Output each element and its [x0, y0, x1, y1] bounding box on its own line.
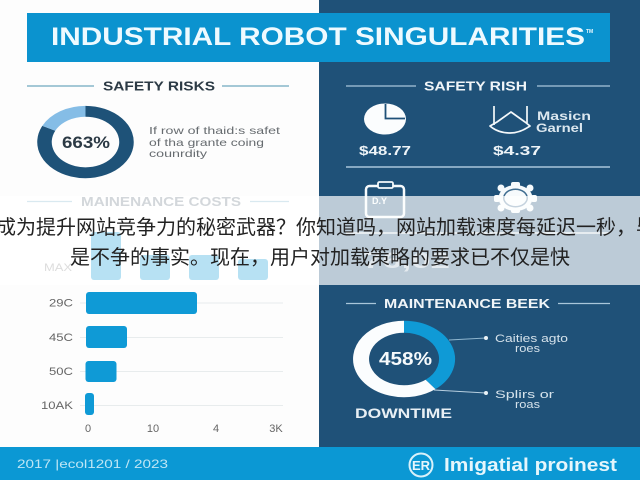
donut chart: downtime: 458% — [379, 349, 432, 369]
callout: caities agto — [449, 333, 568, 355]
title banner: TM — [586, 29, 593, 35]
bar chart: maintenance costs: 45C — [49, 332, 73, 344]
heading: maintenance beek: MAINTENANCE BEEK — [384, 296, 551, 311]
icon: clipboard — [366, 182, 404, 217]
icon: gear — [494, 182, 537, 213]
stat: hidden value behind banner: 76,02 — [363, 248, 450, 273]
bar chart: maintenance costs: 10AK — [41, 400, 74, 412]
icon: pie chart — [364, 104, 406, 134]
label: downtime: DOWNTIME — [355, 405, 452, 421]
text block: safety description: counrdity — [149, 148, 208, 160]
callout: splirs or: roas — [515, 399, 541, 411]
title banner — [27, 13, 610, 62]
text block: safety description: If row of thaid:s safet — [149, 125, 280, 137]
bar chart: maintenance costs — [41, 292, 283, 435]
footer: ER — [412, 458, 431, 473]
panel: right background — [319, 0, 640, 447]
label: masicn gamel — [536, 109, 591, 135]
panel: left background — [0, 0, 319, 447]
callout: caities agto: Caities agto — [495, 333, 568, 345]
footer: 2017 |ecol1201 / 2023 — [17, 457, 168, 471]
donut chart: downtime — [361, 327, 447, 391]
icon: clipboard: D.Y — [372, 196, 387, 206]
bar chart: maintenance costs: 0 — [85, 423, 91, 435]
heading: safety risks: SAFETY RISKS — [103, 78, 215, 94]
overlay banner with text: 是不争的事实。现在，用户对加载策略的要求已不仅是快 — [70, 247, 570, 269]
label: masicn gamel: Masicn — [537, 109, 591, 123]
bar chart: maintenance costs: 3K — [269, 423, 283, 435]
footer: Imigatial proinest — [444, 455, 617, 475]
heading: maintenance costs: MAINENANCE COSTS — [81, 194, 241, 209]
text block: safety description — [149, 125, 280, 160]
icon: mask outline — [490, 106, 530, 133]
text block: safety description: of tha grante coing — [149, 137, 264, 149]
title banner: INDUSTRIAL ROBOT SINGULARITIES — [51, 23, 585, 51]
overlay banner with text — [0, 196, 640, 285]
footer — [0, 447, 640, 480]
bar chart: maintenance costs: 29C — [49, 298, 73, 310]
heading: safety rish: SAFETY RISH — [424, 78, 527, 94]
bar group: faded vertical bars: MAX — [44, 262, 73, 274]
donut chart: safety risks — [44, 111, 126, 173]
stat: mask value: $4.37 — [493, 143, 541, 158]
bar group: faded vertical bars — [44, 232, 268, 280]
callout: caities agto: roes — [515, 343, 541, 355]
bar chart: maintenance costs: 50C — [49, 366, 73, 378]
bar chart: maintenance costs: 10 — [147, 423, 159, 435]
callout: splirs or: Splirs or — [495, 389, 554, 401]
stat: pie value: $48.77 — [359, 143, 411, 158]
callout: splirs or — [434, 389, 554, 411]
label: masicn gamel: Garnel — [536, 121, 583, 135]
donut chart: safety risks: 663% — [62, 133, 110, 152]
bar chart: maintenance costs: 4 — [213, 423, 219, 435]
